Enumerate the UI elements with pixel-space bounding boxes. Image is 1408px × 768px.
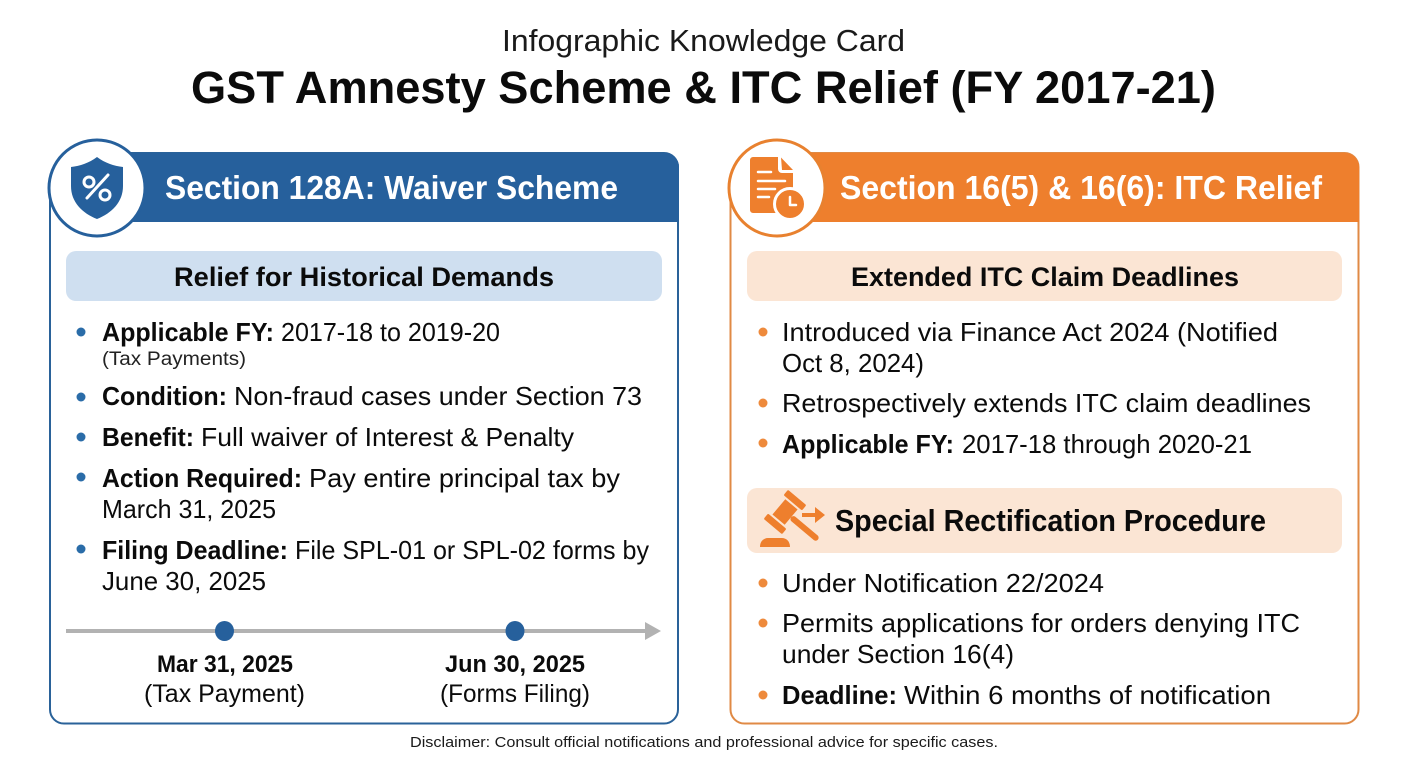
bullet: filing deadline xyxy=(76,535,649,596)
timeline xyxy=(66,621,661,708)
subheading: extended ITC claim deadlines: Extended ITC Claim Deadlines xyxy=(851,262,1239,292)
panel outline xyxy=(730,153,1358,724)
bullet: permits applications xyxy=(758,608,1300,669)
subheading: special rectification procedure: Special Rectification Procedure xyxy=(835,503,1266,538)
main title: GST Amnesty Scheme & ITC Relief (FY 2017-21) xyxy=(191,62,1216,113)
milestone: March 31: Mar 31, 2025 xyxy=(157,651,293,678)
panel: Section 16(5) and 16(6) ITC relief xyxy=(729,140,1359,724)
timeline arrow xyxy=(66,622,661,640)
bullet: filing deadline: Filing Deadline: xyxy=(102,535,288,565)
header title: Section 16(5) & 16(6): ITC Relief xyxy=(840,169,1323,206)
panel header band xyxy=(97,153,679,222)
milestone: June 30: (Forms Filing) xyxy=(440,680,590,708)
disclaimer: Disclaimer: Consult official notifications and professional advice for specific cases. xyxy=(410,734,998,751)
bullet: applicable FY: Applicable FY: xyxy=(102,317,274,347)
bullet: action required: Pay entire principal tax by xyxy=(309,463,620,493)
bullet: applicable FY: 2017-18 to 2019-20 xyxy=(281,317,500,347)
bullet: permits applications: under Section 16(4) xyxy=(782,639,1014,669)
bullet: applicable FY: 2017-18 through 2020-21 xyxy=(962,429,1252,459)
icon: document with clock xyxy=(729,140,825,236)
panel: Section 128A waiver scheme xyxy=(49,140,679,724)
milestone: March 31: (Tax Payment) xyxy=(144,680,305,708)
bullet: deadline: Within 6 months of notification xyxy=(904,680,1271,710)
icon: gavel with arrow xyxy=(760,490,830,554)
bullet: condition: Non-fraud cases under Section 73 xyxy=(234,381,642,411)
bullet: introduced via Finance Act: Oct 8, 2024) xyxy=(782,348,924,378)
bullet: benefit: Benefit: xyxy=(102,422,194,452)
bullet: introduced via Finance Act xyxy=(758,317,1278,378)
bullet: action required: Action Required: xyxy=(102,463,302,493)
subheading: relief for historical demands xyxy=(66,251,662,301)
bullet: condition: Condition: xyxy=(102,381,227,411)
bullet: applicable FY: (Tax Payments) xyxy=(102,349,246,370)
bullet: introduced via Finance Act: Introduced via Finance Act 2024 (Notified xyxy=(782,317,1278,347)
icon: shield with percent xyxy=(49,140,145,236)
panel header band xyxy=(777,153,1359,222)
panel outline xyxy=(50,153,678,724)
subheading: relief for historical demands: Relief for Historical Demands xyxy=(174,262,554,292)
bullet: applicable FY xyxy=(758,429,1252,459)
bullet: retrospective extension: Retrospectively extends ITC claim deadlines xyxy=(782,388,1311,418)
bullet: action required: March 31, 2025 xyxy=(102,494,276,524)
bullet: permits applications: Permits applications for orders denying ITC xyxy=(782,608,1300,638)
milestone: March 31 xyxy=(144,621,305,708)
milestone: June 30: Jun 30, 2025 xyxy=(445,651,585,678)
header title: Section 128A: Waiver Scheme xyxy=(165,169,618,206)
bullet: action required xyxy=(76,463,620,524)
subheading: special rectification procedure xyxy=(747,488,1342,554)
bullet: filing deadline: June 30, 2025 xyxy=(102,566,266,596)
bullet: deadline xyxy=(758,680,1271,710)
bullet: deadline: Deadline: xyxy=(782,680,897,710)
milestone: June 30 xyxy=(440,621,590,708)
bullet: condition xyxy=(76,381,642,411)
bullet: applicable FY xyxy=(76,317,500,370)
eyebrow heading: Infographic Knowledge Card xyxy=(502,23,905,58)
bullet: applicable FY: Applicable FY: xyxy=(782,429,954,459)
bullet: notification: Under Notification 22/2024 xyxy=(782,568,1104,598)
bullet: benefit: Full waiver of Interest & Penalty xyxy=(201,422,574,452)
title block xyxy=(191,23,1216,113)
bullet: filing deadline: File SPL-01 or SPL-02 forms by xyxy=(295,535,649,565)
subheading: extended ITC claim deadlines xyxy=(747,251,1342,301)
